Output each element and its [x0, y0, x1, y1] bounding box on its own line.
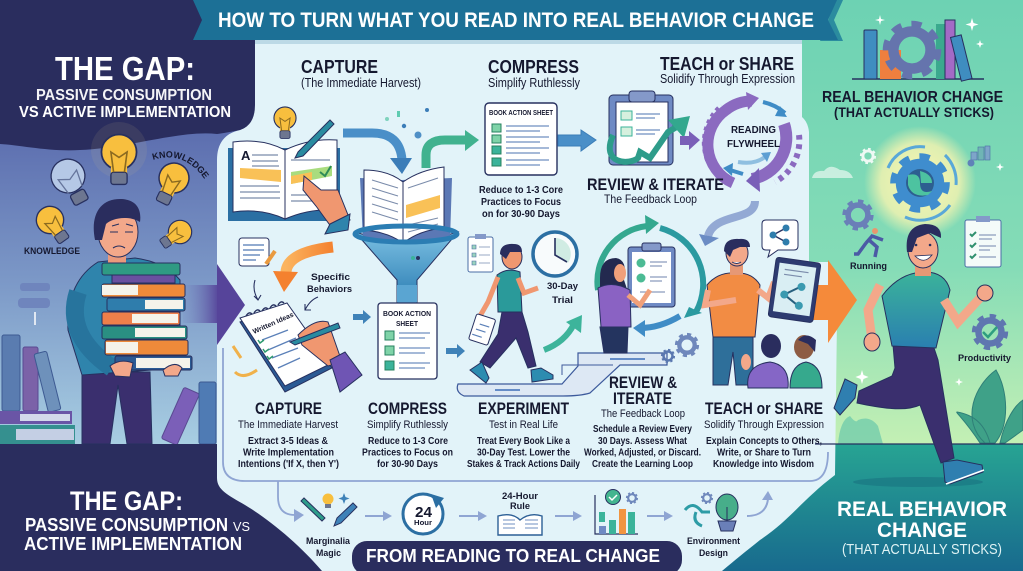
arrow: green up arrow	[544, 315, 582, 350]
label: capture heading: CAPTURE	[301, 57, 378, 77]
label: reading flywheel: READING	[731, 124, 776, 136]
label: knowledge left: KNOWLEDGE	[24, 246, 80, 256]
text: reduce to core practices	[479, 184, 563, 220]
label: compress heading: COMPRESS	[488, 57, 579, 77]
diagram: reading flywheel	[705, 92, 799, 192]
text: capture column: Extract 3-5 Ideas &	[248, 435, 328, 447]
text: teach column: Solidify Through Expression	[704, 419, 824, 431]
icon: glowing gear	[864, 126, 976, 238]
text: experiment column	[467, 399, 580, 470]
text: compress column: Practices to Focus on	[362, 446, 453, 458]
card: book action sheet top: BOOK ACTION SHEET	[489, 110, 554, 117]
label: environment design: Environment	[687, 536, 741, 547]
heading: the gap top: VS ACTIVE IMPLEMENTATION	[19, 104, 231, 121]
heading: real behavior change top: (THAT ACTUALLY STICKS)	[834, 105, 994, 120]
heading: real behavior change bottom	[837, 498, 1007, 558]
panel background: behavior change ground	[715, 444, 1023, 571]
illustration: review loop with woman and clipboard	[597, 215, 703, 353]
label: specific behaviors	[307, 272, 352, 295]
icon: small notepad	[239, 238, 275, 266]
label: knowledge curved: KNOWLEDGE	[152, 151, 209, 179]
text: capture column: CAPTURE	[255, 399, 322, 418]
panel background: the gap scene	[0, 125, 245, 450]
text: the gap bottom heading: PASSIVE CONSUMPTION	[25, 515, 228, 535]
illustration: man holding stack of books	[68, 199, 192, 444]
icon: 24 hour clock: Hour	[414, 518, 432, 527]
illustration: audience	[741, 334, 822, 388]
text: teach column: TEACH or SHARE	[705, 399, 823, 418]
decoration: sparkles	[856, 15, 1004, 386]
card: book action sheet top	[485, 103, 557, 175]
label: productivity: Productivity	[958, 353, 1012, 364]
illustration: teacher with tablet	[705, 239, 774, 385]
label: teach or share heading	[660, 54, 795, 86]
text: capture column: The Immediate Harvest	[238, 419, 338, 431]
icon: review clipboard with green arrow	[609, 91, 690, 165]
icon: 24 hour clock	[403, 494, 444, 534]
icon: productivity gear	[975, 317, 1005, 347]
illustration: running man	[834, 224, 993, 487]
label: specific behaviors: Behaviors	[307, 284, 352, 295]
text: capture column	[238, 399, 339, 470]
icon: environment design	[685, 493, 741, 559]
icon: gear running	[845, 202, 871, 228]
label: 30-day trial	[547, 281, 579, 306]
illustration: stairs	[457, 353, 667, 396]
text: experiment column: EXPERIMENT	[478, 399, 569, 418]
heading: the gap top: THE GAP:	[55, 50, 195, 87]
icon: decorative marks	[233, 346, 257, 376]
text: experiment column: Treat Every Book Like a	[477, 435, 570, 447]
text: teach column	[704, 399, 824, 470]
arrow: up-right arrow	[747, 491, 773, 516]
arrow: green from funnel	[426, 130, 479, 168]
title banner tail	[820, 0, 843, 41]
label: capture heading: (The Immediate Harvest)	[301, 76, 421, 90]
text: the gap bottom heading: VS	[233, 519, 250, 534]
card: book action sheet lower	[378, 303, 437, 379]
label: book action sheet	[383, 309, 431, 328]
arrow: small blue arrows	[353, 310, 465, 358]
label: compress heading	[488, 57, 581, 90]
heading: real behavior change bottom: (THAT ACTUALLY STICKS)	[842, 541, 1002, 558]
panel: left background books	[0, 283, 216, 445]
text: teach column: Write, or Share to Turn	[717, 446, 811, 458]
label: marginalia magic: Marginalia	[306, 536, 351, 547]
icon: books and gear	[852, 20, 984, 81]
label: marginalia magic	[306, 536, 351, 559]
label: 30-day trial: 30-Day	[547, 281, 579, 292]
label: 24-hour rule: Rule	[510, 501, 530, 512]
arrow: orange curved arrow	[273, 247, 333, 292]
icon: 24 hour clock: 24	[415, 504, 433, 521]
label: reading flywheel: FLYWHEEL	[727, 138, 781, 150]
icon: small runner	[854, 228, 883, 257]
panel: top navy header shape	[0, 0, 255, 150]
text: experiment column: Test in Real Life	[489, 419, 558, 431]
label: teach or share heading: TEACH or SHARE	[660, 54, 794, 74]
icon: tablet with share icon	[768, 257, 821, 323]
label: running: Running	[850, 261, 887, 272]
text: reduce to core practices: Practices to Focus	[481, 196, 561, 208]
arrow: purple to flywheel	[680, 131, 700, 150]
text: review column: Worked, Adjusted, or Discard.	[584, 446, 701, 458]
label: capture heading	[301, 57, 421, 90]
text: experiment column: 30-Day Test. Lower the	[477, 446, 570, 458]
text: reduce to core practices: Reduce to 1-3 Core	[479, 184, 563, 196]
label: environment design	[687, 536, 741, 559]
icon: knowledge light bulbs	[31, 122, 196, 254]
illustration: experiment runner	[468, 244, 553, 383]
icon: checklist clipboard	[965, 216, 1001, 267]
label: review and iterate heading: REVIEW & ITERATE	[587, 175, 724, 194]
arrow: blue to funnel	[343, 133, 412, 174]
banner: from reading to real change	[352, 541, 682, 571]
text: experiment column: Stakes & Track Actions Daily	[467, 458, 580, 470]
heading: the gap top: PASSIVE CONSUMPTION	[36, 87, 212, 104]
heading: real behavior change top	[822, 89, 1003, 120]
text: compress column: COMPRESS	[368, 399, 447, 418]
text: the gap bottom heading: THE GAP:	[70, 486, 183, 516]
text: teach column: Explain Concepts to Others,	[706, 435, 822, 447]
text: compress column: for 30-90 Days	[377, 458, 438, 470]
text: reduce to core practices: on for 30-90 Days	[482, 208, 560, 220]
text: review column: 30 Days. Assess What	[598, 435, 687, 447]
label: compress heading: Simplify Ruthlessly	[488, 76, 581, 90]
arrow: thin arrows to notepad	[254, 280, 318, 310]
label: environment design: Design	[699, 548, 728, 559]
label: book action sheet: SHEET	[396, 319, 418, 328]
label: marginalia magic: Magic	[316, 548, 341, 559]
illustration: written ideas notepad and hand	[240, 302, 362, 392]
illustration: capture open book with pen and hand	[228, 107, 350, 234]
banner: from reading to real change: FROM READING TO REAL CHANGE	[366, 546, 660, 566]
label: specific behaviors: Specific	[311, 272, 350, 283]
illustration: book dropping into funnel	[355, 108, 458, 312]
text: compress column: Simplify Ruthlessly	[367, 419, 448, 431]
chart icon: progress bars	[595, 490, 638, 534]
icon: share speech bubble	[762, 220, 798, 257]
icon: small gears	[662, 335, 697, 362]
label: 30-day trial: Trial	[552, 295, 573, 306]
label: 24-hour rule: 24-Hour	[502, 491, 538, 502]
label: book action sheet: BOOK ACTION	[383, 309, 431, 318]
text: review column: Schedule a Review Every	[593, 423, 692, 435]
arrow: blue to clipboard	[558, 130, 596, 151]
text: teach column: Knowledge into Wisdom	[713, 458, 814, 470]
illustration: ground plants	[815, 370, 1023, 444]
panel: bottom navy shape	[0, 444, 322, 571]
arrow: orange big arrow	[808, 260, 857, 343]
icon: cloud	[812, 167, 853, 178]
icon: marginalia magic	[301, 493, 357, 559]
icon: 24-hour rule book	[498, 491, 542, 535]
text: capture column: Intentions ('If X, then Y')	[238, 458, 339, 470]
illustration: capture open book with pen and hand: A	[241, 148, 251, 163]
text: review column: REVIEW &	[609, 373, 677, 392]
text: review column	[584, 373, 701, 470]
panel: central process panel	[217, 40, 837, 571]
heading: real behavior change bottom: CHANGE	[877, 519, 967, 542]
arrow: curved blue-purple arrow	[699, 201, 755, 246]
title banner	[193, 0, 838, 40]
label: review and iterate heading: The Feedback Loop	[604, 192, 697, 206]
heading: the gap top	[19, 50, 231, 121]
label: review and iterate heading	[587, 175, 724, 206]
label: teach or share heading: Solidify Through Expression	[660, 72, 795, 86]
label: 24-hour rule	[502, 491, 538, 512]
text: the gap bottom heading	[24, 486, 250, 554]
text: review column: The Feedback Loop	[601, 408, 685, 420]
arrows: bottom row arrows	[365, 515, 668, 517]
text: review column: Create the Learning Loop	[592, 458, 693, 470]
text: compress column	[362, 399, 453, 470]
arrow: purple gap arrow	[183, 264, 245, 345]
label: reading flywheel	[727, 124, 781, 150]
illustration: written ideas notepad and hand: Written Ideas	[252, 312, 295, 336]
panel background: behavior change sky	[795, 0, 1023, 445]
heading: real behavior change top: REAL BEHAVIOR CHANGE	[822, 89, 1003, 106]
icon: compress clock	[533, 232, 577, 276]
text: capture column: Write Implementation	[243, 446, 334, 458]
text: compress column: Reduce to 1-3 Core	[368, 435, 448, 447]
icon: white gear	[861, 149, 875, 163]
icon: small clipboard	[468, 234, 493, 272]
heading: real behavior change bottom: REAL BEHAVIOR	[837, 498, 1007, 521]
icon: mini chart	[968, 146, 990, 166]
divider frame	[223, 348, 828, 515]
text: review column: ITERATE	[613, 389, 672, 408]
text: the gap bottom heading: ACTIVE IMPLEMENTATION	[24, 534, 242, 554]
title: HOW TO TURN WHAT YOU READ INTO REAL BEHAVIOR CHANGE	[218, 9, 814, 32]
